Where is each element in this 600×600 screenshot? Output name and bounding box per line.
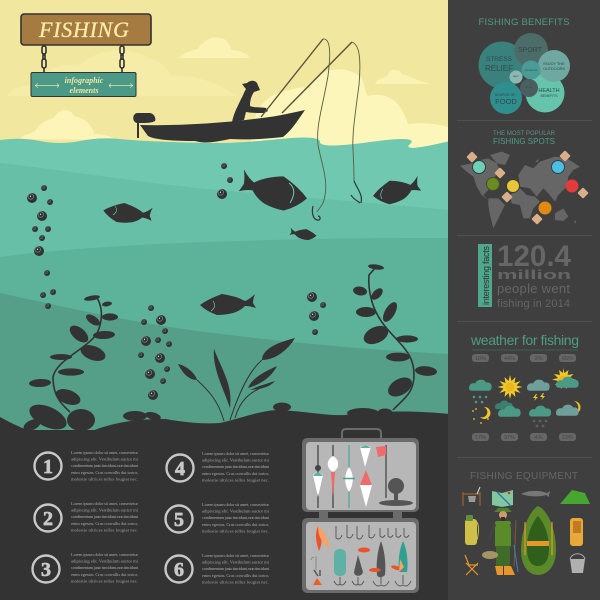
interesting facts	[478, 240, 571, 310]
hull	[140, 110, 305, 142]
fisherman	[232, 81, 268, 122]
floats	[313, 445, 413, 508]
benefits bubble chart: SOURCE OF	[495, 93, 515, 97]
wood plate	[21, 14, 151, 45]
item 4	[166, 451, 270, 482]
spots heading: FISHING SPOTS	[493, 137, 555, 146]
equipment illustrations	[463, 487, 590, 575]
benefits bubble chart: RELAXATION	[525, 69, 538, 72]
numbered items	[32, 450, 270, 584]
sea floor and rocks	[0, 399, 450, 600]
item 6: 6	[174, 559, 184, 581]
inflatable boat	[521, 506, 556, 575]
weather percentages: 65%	[562, 356, 573, 362]
swordfish	[521, 491, 550, 497]
interesting facts: people went	[497, 281, 570, 296]
item 6	[166, 553, 270, 584]
bucket	[570, 554, 585, 573]
sign subtitle: infographic	[65, 76, 104, 85]
fisherman with gear	[482, 508, 518, 575]
benefits bubble chart	[478, 33, 570, 114]
item 2: 2	[43, 508, 53, 530]
benefits bubble chart: HEALTH	[538, 88, 560, 94]
thermos	[465, 515, 479, 545]
right sidebar background	[448, 0, 600, 600]
item 3	[32, 552, 139, 583]
big fish	[237, 169, 310, 214]
weather percentages: 3%	[535, 356, 543, 362]
benefits bubble chart: SPORT	[518, 47, 543, 54]
map	[492, 490, 513, 507]
weather percentages: 10%	[475, 356, 486, 362]
interesting facts: interesting facts	[481, 246, 491, 305]
item 1: 1	[43, 456, 53, 478]
tiny fish	[289, 228, 317, 241]
item 5	[166, 502, 270, 533]
interesting facts: fishing in 2014	[497, 298, 570, 310]
sign title: FISHING	[38, 17, 129, 42]
sky background	[0, 0, 450, 160]
left seaweed	[29, 294, 118, 412]
item 4: 4	[175, 458, 185, 480]
campfire	[463, 487, 480, 506]
item 2	[34, 501, 139, 532]
water layers	[0, 138, 450, 430]
right seaweed	[352, 263, 437, 410]
fishing rods and lines	[261, 39, 361, 220]
folding chair	[465, 555, 478, 575]
title sign	[21, 14, 151, 96]
fish group	[102, 169, 422, 315]
weather heading: weather for fishing	[470, 332, 579, 348]
title sign: elements	[70, 86, 98, 95]
green plate	[31, 72, 136, 96]
item 5: 5	[174, 509, 184, 531]
lower fish	[200, 294, 256, 315]
left fish	[102, 200, 154, 227]
backpack	[570, 518, 583, 546]
bubbles	[27, 163, 326, 400]
sign chains	[42, 46, 124, 72]
weather percentages: 17%	[475, 435, 486, 441]
benefits bubble chart: SOCIAL	[526, 86, 532, 89]
right fish	[371, 176, 422, 207]
benefits bubble chart: FOOD	[495, 97, 517, 106]
benefits heading: FISHING BENEFITS	[478, 17, 570, 28]
weather icons	[469, 368, 580, 427]
lures and hooks	[311, 525, 411, 586]
interesting facts: 120.4	[497, 240, 571, 273]
benefits bubble chart: OUTDOORS	[543, 67, 565, 71]
dividers	[457, 120, 592, 458]
clouds	[8, 38, 450, 150]
item 3: 3	[41, 559, 51, 581]
benefits bubble chart: RELIEF	[485, 64, 513, 73]
benefits bubble chart: STRESS	[486, 56, 513, 63]
benefits bubble chart: ENJOY THE	[543, 62, 565, 66]
weather percentages: 44%	[504, 356, 515, 362]
interesting facts: million	[497, 267, 571, 282]
equipment heading: FISHING EQUIPMENT	[470, 471, 578, 482]
world map	[460, 152, 580, 228]
benefits bubble chart: FAMILY	[513, 75, 520, 78]
outboard motor	[133, 113, 155, 138]
item 1	[34, 450, 139, 481]
spots heading	[493, 131, 556, 146]
tent	[560, 490, 590, 504]
centre water plant	[178, 338, 295, 421]
weather percentages	[472, 354, 576, 441]
tackle box	[302, 429, 419, 593]
weather percentages: 4%	[535, 435, 543, 441]
map pins	[466, 150, 589, 225]
benefits bubble chart: BENEFITS	[540, 94, 558, 98]
spots heading: THE MOST POPULAR	[493, 131, 556, 137]
weather percentages: 37%	[504, 435, 515, 441]
weather percentages: 22%	[562, 435, 573, 441]
fishing boat with fisherman	[133, 81, 305, 142]
